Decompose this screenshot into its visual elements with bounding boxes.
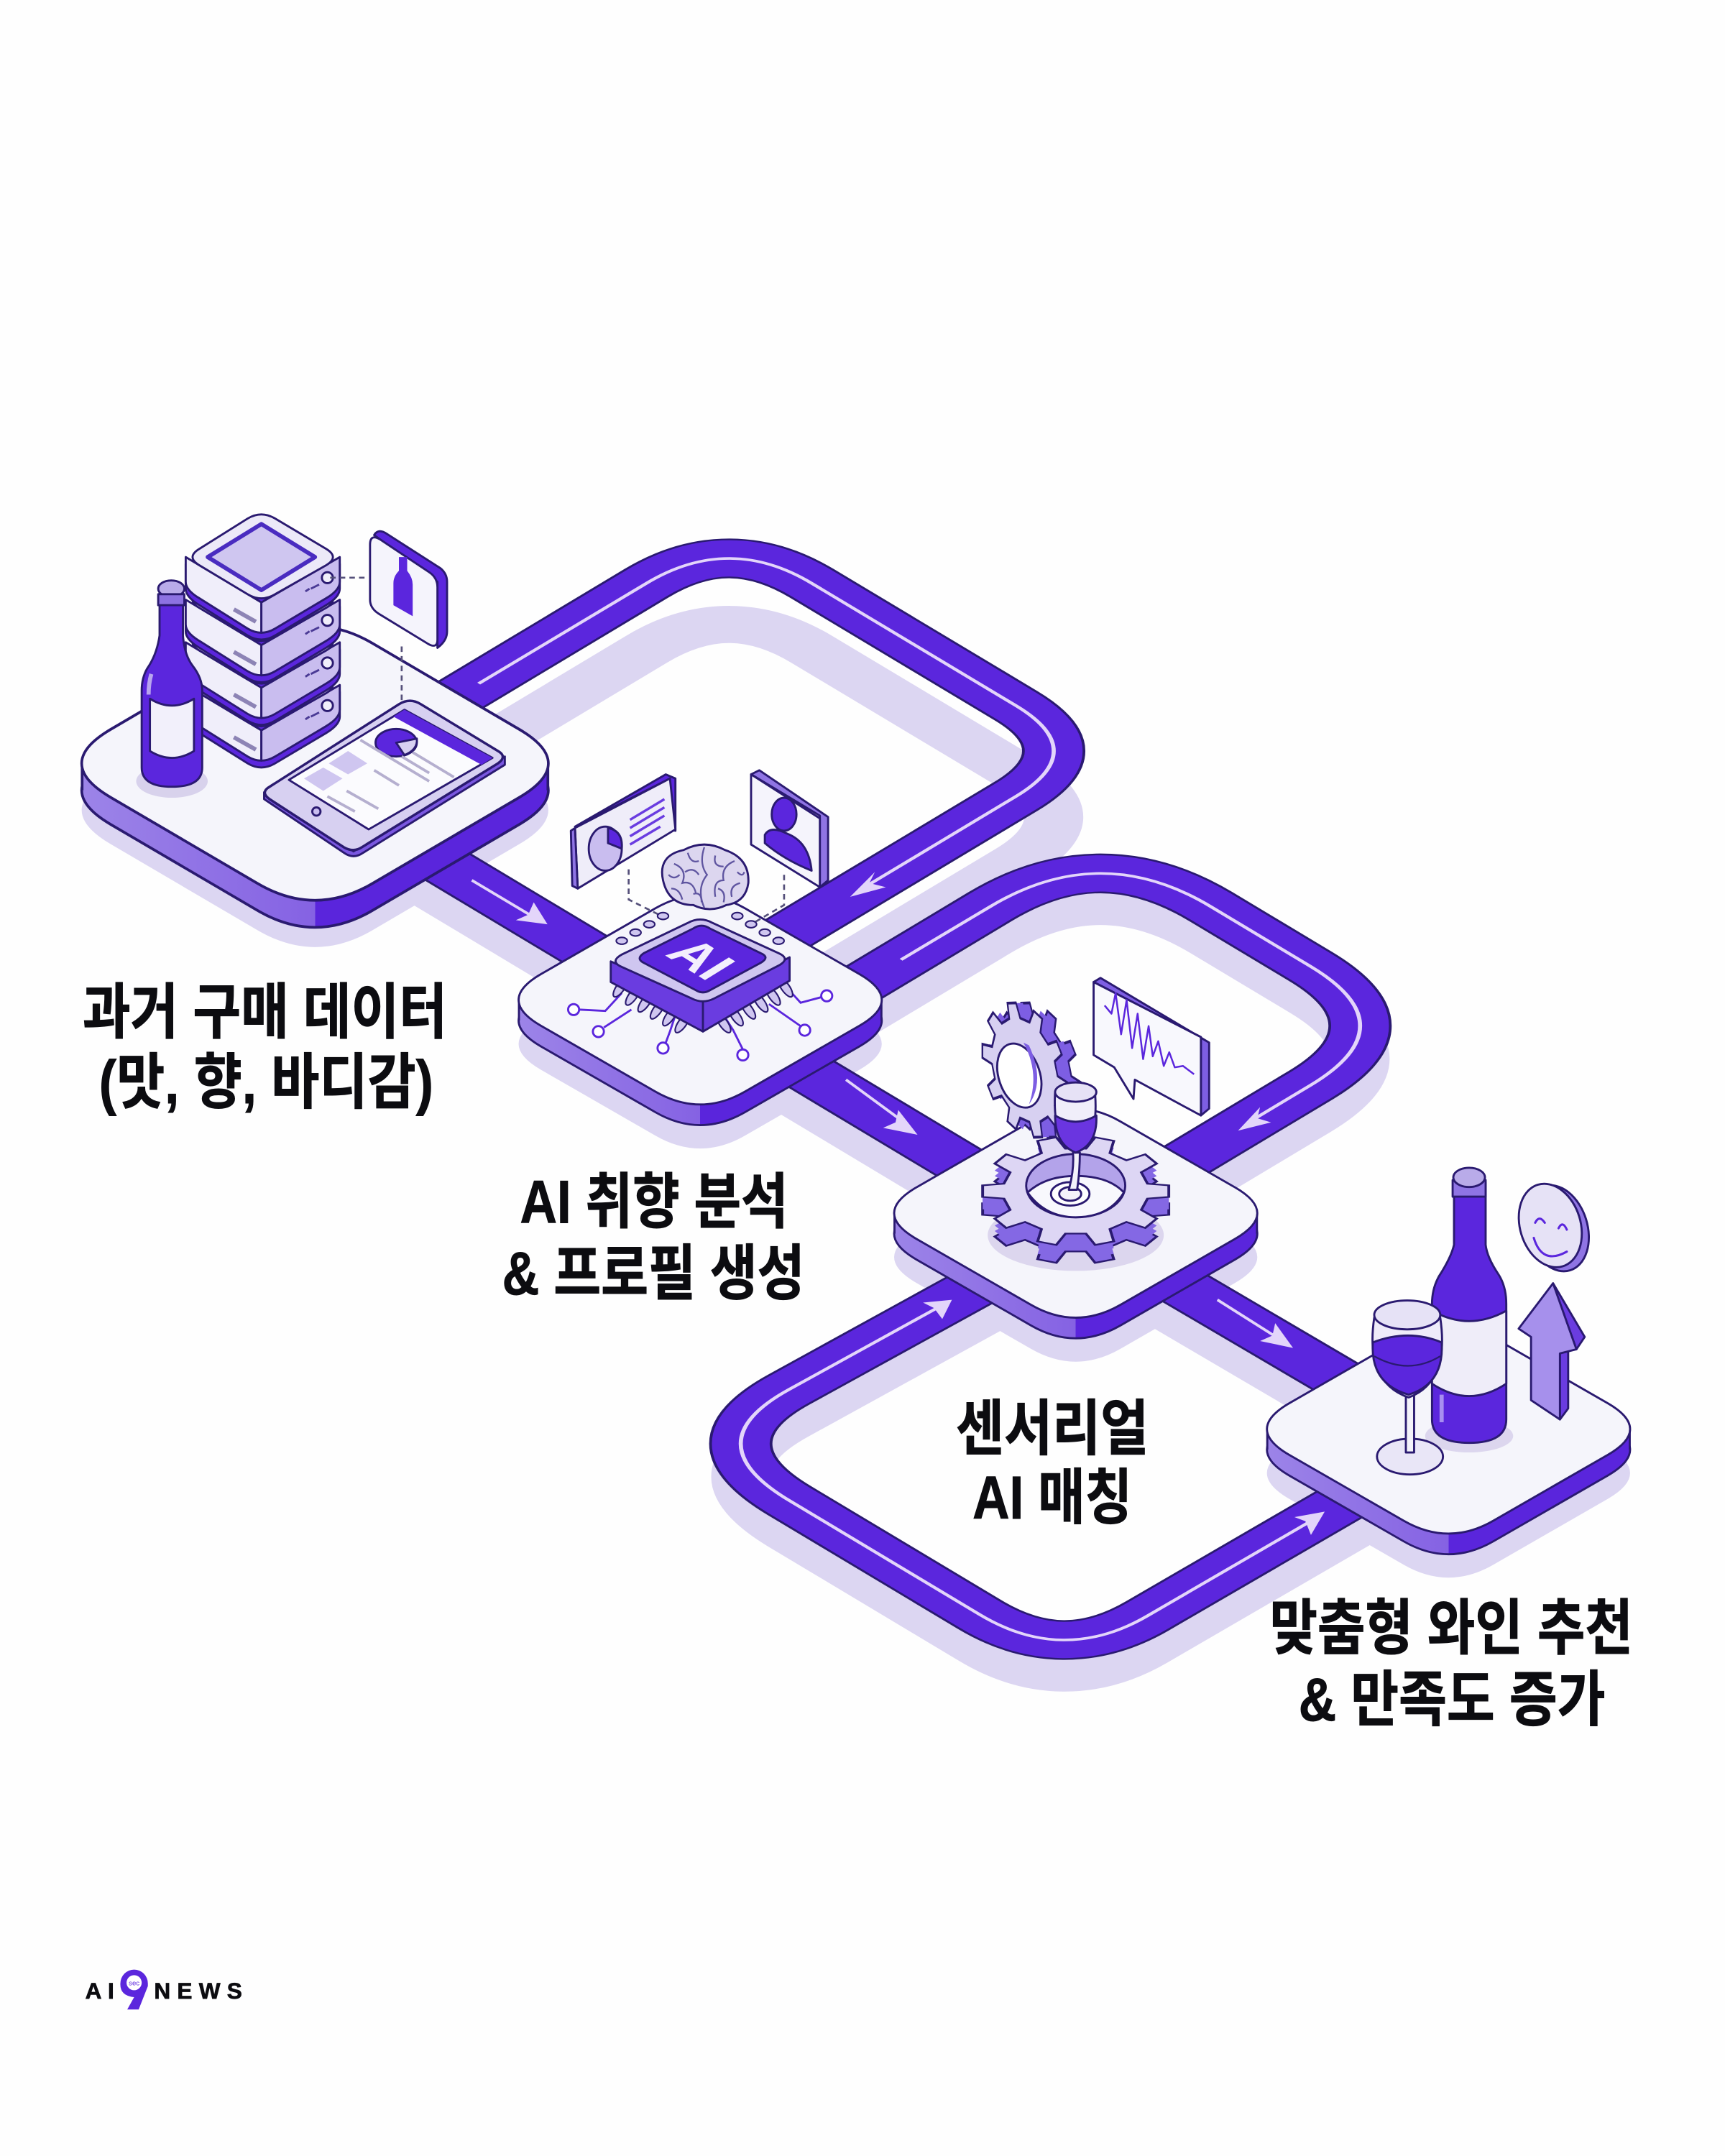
icon: wine glass with wine	[1373, 1301, 1443, 1475]
track shadows	[413, 625, 1376, 1673]
icon: standing gear	[983, 987, 1081, 1153]
text: AI analysis label	[502, 1168, 805, 1307]
text: purchase data label: 과거 구매 데이터	[83, 978, 447, 1046]
text: recommendation label	[1270, 1595, 1633, 1733]
text: sensorial matching label: 센서리얼	[956, 1395, 1149, 1462]
panel: purchase data platform	[82, 515, 548, 927]
connector: matching to recommendation	[1156, 1271, 1368, 1396]
icon: brain	[662, 844, 748, 909]
logo: AI 9 NEWS: NEWS	[154, 1978, 242, 2004]
platform shadows	[82, 673, 1630, 1577]
track: loop from AI analysis to sensorial matching	[839, 873, 1360, 1170]
track: loop from purchase data to AI analysis	[413, 558, 1054, 944]
text: AI analysis label: & 프로필 생성	[502, 1240, 805, 1307]
connector: AI to matching	[784, 1058, 990, 1181]
icon: AI chip	[568, 913, 832, 1061]
logo: AI 9 NEWS: AI	[86, 1978, 114, 2004]
logo: AI 9 NEWS	[86, 1970, 242, 2009]
icon: smile coin	[1509, 1176, 1599, 1279]
icon: flat gear	[983, 1138, 1169, 1271]
text: purchase data label	[83, 978, 447, 1116]
text: recommendation label: & 만족도 증가	[1299, 1666, 1605, 1733]
arrowhead	[1238, 1107, 1271, 1130]
panel: AI analysis platform	[519, 770, 882, 1125]
panel: sensorial matching platform	[894, 978, 1257, 1338]
logo: AI 9 NEWS: sec	[129, 1980, 139, 1988]
icon: tablet with report	[264, 701, 505, 856]
icon: chart card	[571, 775, 676, 888]
icon: server stack	[185, 515, 340, 768]
icon: wine glass	[1051, 1082, 1096, 1206]
icon: up arrow	[1519, 1284, 1585, 1419]
text: purchase data label: (맛, 향, 바디감)	[99, 1049, 433, 1116]
arrowhead	[923, 1300, 952, 1319]
dashed links	[629, 870, 784, 924]
text: sensorial matching label: AI 매칭	[972, 1464, 1132, 1531]
track: loop from sensorial matching to recommendation	[741, 1263, 1376, 1640]
circuit traces	[568, 987, 832, 1061]
connector: data to AI	[413, 846, 605, 962]
text: sensorial matching label	[956, 1395, 1149, 1531]
icon: large wine bottle	[1425, 1168, 1513, 1452]
panel: personalized recommendation platform	[1267, 1168, 1630, 1554]
icon: wine bottle	[136, 581, 208, 798]
icon: sound wave bubble	[1094, 978, 1209, 1115]
chip text: AI	[654, 931, 747, 988]
arrowhead	[1294, 1511, 1325, 1535]
chip legs	[611, 913, 795, 1035]
icon: profile card	[751, 770, 828, 887]
arrowhead	[850, 872, 886, 897]
text: recommendation label: 맞춤형 와인 추천	[1270, 1595, 1633, 1662]
icon: bottle card	[370, 531, 447, 648]
connector: dashed data links	[330, 578, 402, 704]
text: AI analysis label: AI 취향 분석	[520, 1168, 788, 1235]
